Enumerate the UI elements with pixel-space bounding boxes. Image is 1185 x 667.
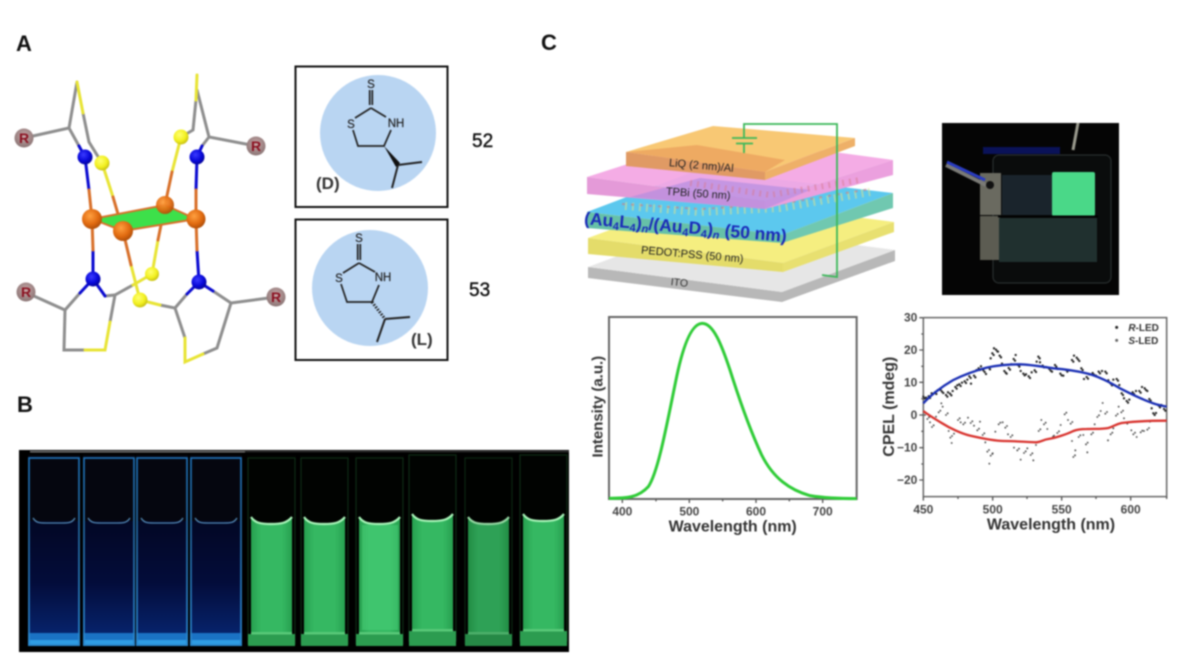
molecular structure: R	[21, 284, 31, 300]
y axis title: Intensity (a.u.)	[590, 356, 607, 457]
layer: PEDOT:PSS	[588, 197, 894, 272]
layer: PEDOT:PSS: PEDOT:PSS (50 nm)	[641, 245, 744, 265]
panel: ligand L	[296, 220, 448, 360]
layer: emitter: n	[641, 223, 649, 236]
panel label: B: B	[17, 392, 33, 417]
x axis title: Wavelength (nm)	[987, 517, 1115, 534]
fit line: S-LED	[923, 411, 1167, 442]
layer: LiQ/Al	[626, 126, 855, 180]
x tick labels: 550	[1052, 503, 1072, 517]
tick labels: 500	[679, 505, 700, 519]
circuit wire and battery	[732, 124, 837, 277]
panel: ligand D: S	[347, 119, 355, 131]
EL curve	[609, 323, 857, 499]
scatter: S-LED	[925, 403, 1150, 464]
y tick labels: 0	[911, 408, 918, 422]
panel: ligand D: S	[367, 79, 375, 91]
layer: LiQ/Al: LiQ (2 nm)/Al	[668, 157, 734, 175]
layer: emitter: (Au	[583, 208, 614, 231]
layer: emitter: /(Au	[648, 214, 683, 237]
tick labels: 600	[746, 505, 766, 519]
y tick labels: 20	[904, 343, 918, 357]
x tick labels	[913, 503, 1141, 517]
legend: S-LED	[1128, 336, 1158, 347]
axes	[923, 318, 1167, 497]
green Au4 plane	[92, 205, 196, 231]
panel: ligand D: (D)	[316, 174, 340, 193]
y tick labels: 30	[904, 311, 918, 325]
panel: ligand D: NH	[388, 118, 404, 130]
panel label: C: C	[541, 30, 557, 55]
x axis ticks	[622, 499, 823, 503]
molecular structure: R	[251, 138, 261, 154]
tick labels: 400	[612, 505, 633, 519]
layer: ITO: ITO	[670, 276, 689, 290]
layer: emitter: n	[712, 229, 720, 242]
fit line: R-LED	[923, 364, 1167, 407]
panel label: A: A	[16, 31, 32, 56]
panel: ligand L: (L)	[411, 330, 433, 349]
molecular structure: R	[271, 289, 281, 305]
tick labels	[612, 505, 833, 519]
tick labels: 700	[813, 505, 833, 519]
layer: emitter: (50 nm)	[719, 220, 788, 246]
layer: emitter: )	[707, 219, 714, 239]
layer: TPBi	[587, 136, 893, 209]
panel: ligand L: S	[355, 233, 363, 245]
x tick labels: 500	[983, 503, 1003, 517]
x tick labels: 450	[913, 503, 934, 517]
chart: CPEL	[881, 311, 1167, 534]
device stack	[583, 124, 895, 302]
y tick labels: 10	[904, 375, 918, 389]
y tick labels	[897, 311, 918, 487]
layer: TPBi: TPBi (50 nm)	[665, 186, 731, 202]
layer: emitter: 4	[629, 222, 637, 235]
y tick labels: −10	[897, 441, 918, 455]
layer: emitter: )	[635, 213, 643, 233]
panel: ligand L: S	[335, 273, 343, 285]
x axis title: Wavelength (nm)	[669, 519, 797, 536]
panel: ligand L: NH	[375, 272, 391, 284]
y tick labels: −20	[897, 473, 918, 487]
layer: emitter	[583, 170, 893, 248]
y axis title: CPEL (mdeg)	[881, 357, 898, 457]
scatter: R-LED	[923, 348, 1165, 415]
layer: emitter: D	[688, 217, 702, 238]
molecular structure	[14, 75, 286, 362]
molecular structure: R	[19, 130, 29, 146]
layer: emitter: L	[619, 211, 631, 232]
photo: working device	[942, 123, 1119, 295]
x tick labels: 600	[1121, 503, 1141, 517]
panel: ligand D	[296, 66, 448, 207]
legend	[1115, 323, 1159, 347]
layer: ITO	[588, 225, 895, 302]
layer: emitter: 4	[612, 221, 620, 233]
photo: cuvettes	[19, 450, 569, 652]
text: 53: 53	[469, 280, 490, 301]
layer: emitter: 4	[700, 228, 708, 241]
text: 52: 52	[472, 131, 493, 152]
legend: R-LED	[1128, 323, 1159, 334]
layer: emitter: 4	[682, 227, 690, 239]
chart: EL spectrum	[590, 317, 857, 536]
